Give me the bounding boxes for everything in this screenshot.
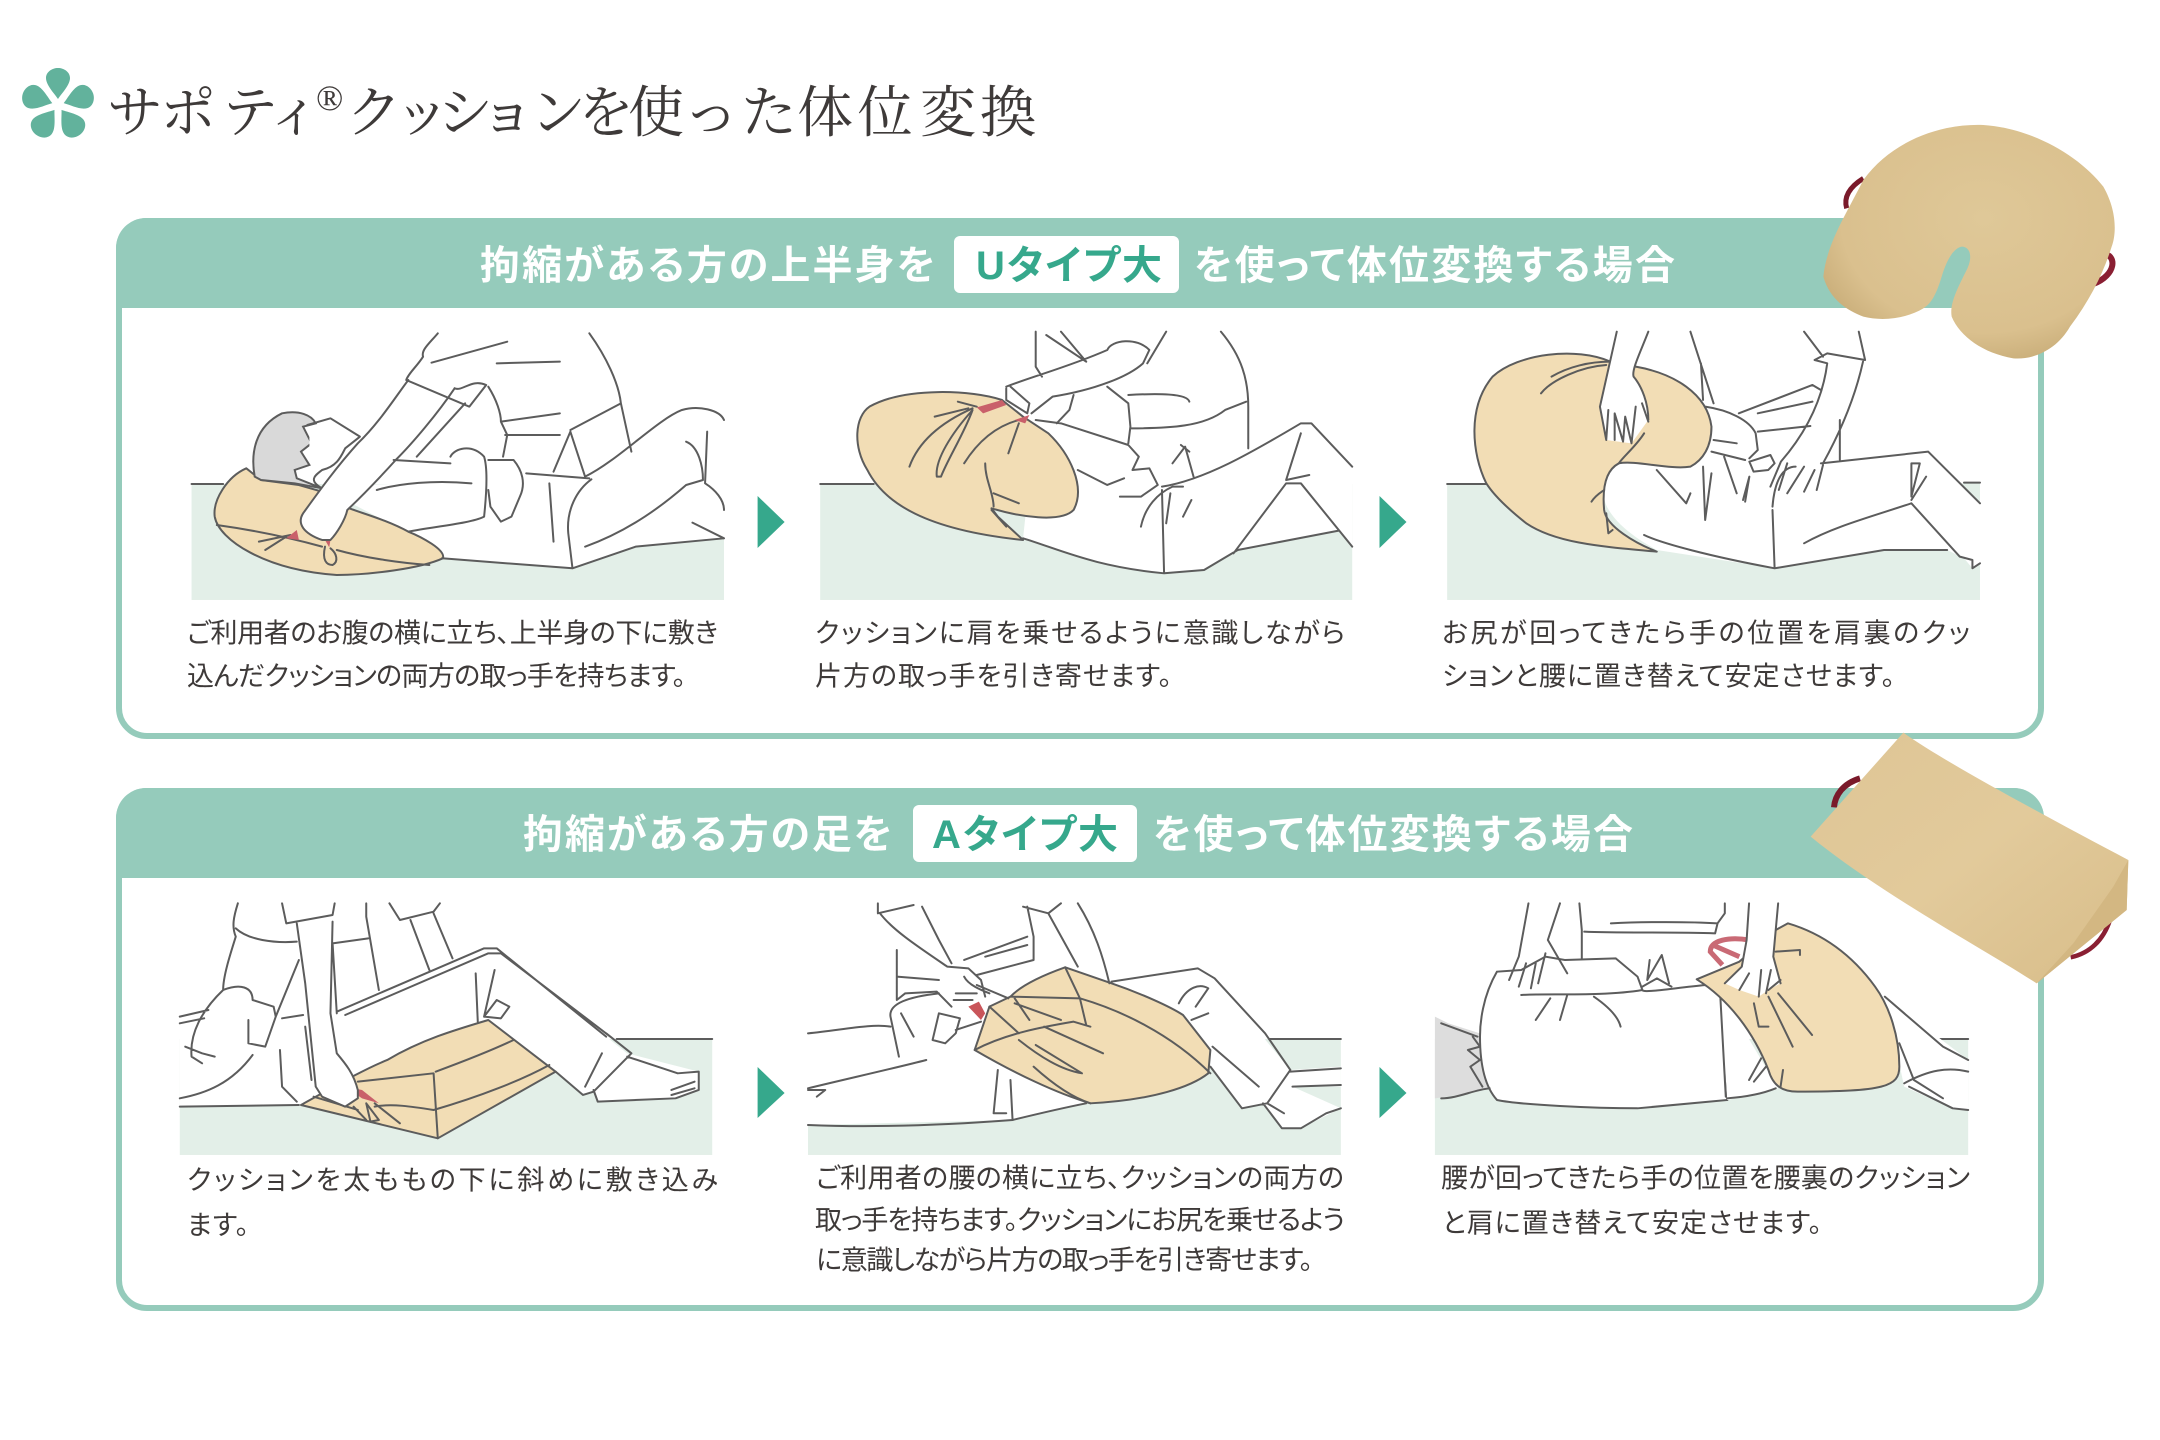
arrow (1380, 1067, 1406, 1118)
heading: U type: Uタイプ大 (976, 244, 1162, 288)
caption: step 3 legs: 腰が回ってきたら手の位置を腰裏のクッション (1441, 1164, 1970, 1194)
heading: U type (116, 218, 2044, 308)
caption: step 2 legs (815, 1164, 1345, 1276)
caption: step 1 legs: ます。 (187, 1210, 249, 1240)
caption: step 3 legs (1441, 1164, 1970, 1238)
photo: U type cushion (1823, 125, 2115, 359)
icon: flower (19, 68, 97, 142)
arrow (758, 1067, 785, 1118)
illustration: step 1 upper body (192, 333, 724, 600)
title: ® (316, 78, 343, 118)
caption: step 3 legs: と肩に置き替えて安定させます。 (1442, 1208, 1822, 1238)
caption: step 3: ションと腰に置き替えて安定させます。 (1442, 662, 1895, 692)
caption: step 1 legs (187, 1166, 718, 1240)
panel: U type (116, 218, 2044, 736)
caption: step 2 legs: に意識しながら片方の取っ手を引き寄せます。 (816, 1246, 1313, 1276)
illustration: step 1 legs (180, 903, 712, 1155)
illustration: step 3 legs (1435, 903, 1968, 1155)
title (107, 78, 1036, 145)
heading: U type: を使って体位変換する場合 (1194, 244, 1675, 288)
heading: A type (116, 788, 2044, 878)
heading: A type: 拘縮がある方の足を (523, 813, 892, 857)
caption: step 3 (1442, 618, 1970, 692)
heading: U type: 拘縮がある方の上半身を (480, 244, 935, 288)
caption: step 2: クッションに肩を乗せるように意識しながら (815, 618, 1345, 648)
caption: step 2 legs: ご利用者の腰の横に立ち、クッションの両方の (816, 1164, 1344, 1194)
caption: step 1: 込んだクッションの両方の取っ手を持ちます。 (187, 662, 686, 692)
arrow (758, 496, 785, 548)
title: サポティ (107, 83, 322, 145)
illustration: step 2 upper body (820, 332, 1352, 600)
arrow (1380, 496, 1406, 548)
caption: step 1 legs: クッションを太ももの下に斜めに敷き込み (187, 1166, 718, 1196)
illustration: step 3 upper body (1447, 332, 1980, 600)
caption: step 1: ご利用者のお腹の横に立ち、上半身の下に敷き (187, 618, 718, 648)
panel: A type (116, 788, 2044, 1308)
caption: step 3: お尻が回ってきたら手の位置を肩裏のクッ (1442, 618, 1970, 648)
heading: A type: Aタイプ大 (932, 813, 1118, 857)
caption: step 2 legs: 取っ手を持ちます。クッションにお尻を乗せるよう (815, 1206, 1345, 1236)
title: クッションを使った体位変換 (346, 83, 1036, 145)
illustration: step 2 legs (808, 903, 1341, 1155)
caption: step 2: 片方の取っ手を引き寄せます。 (815, 662, 1172, 692)
caption: step 2 (815, 618, 1345, 692)
caption: step 1 (187, 618, 718, 692)
heading: A type: を使って体位変換する場合 (1153, 813, 1633, 857)
photo: A type cushion (1811, 733, 2128, 983)
